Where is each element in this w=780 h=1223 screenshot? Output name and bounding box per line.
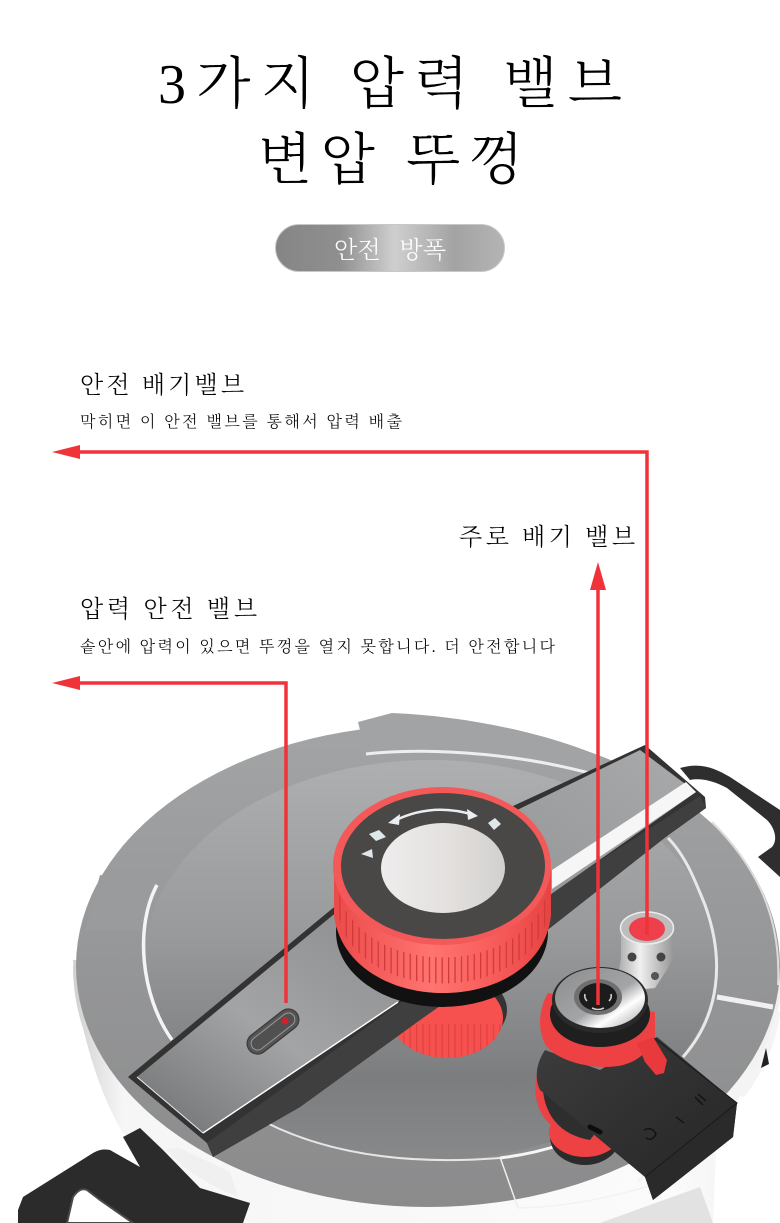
silver valve cap [552,967,648,1033]
red collar [540,993,655,1067]
icon: right handle [680,766,780,877]
lower red dial under the bar [398,994,507,1058]
text block: safety exhaust valve: 막히면 이 안전 밸브를 통해서 압력 배출 [80,412,403,431]
lid bottom lug [500,1157,652,1208]
handle bar [128,745,706,1157]
lid left lug [85,875,157,930]
three-slot vent [574,979,622,1015]
icon: safety exhaust valve part [618,912,674,989]
pressure dial knob [333,787,552,995]
lid right latch [717,997,780,1097]
lid highlights [144,885,172,1040]
black selector tab [537,1037,737,1200]
text block: main exhaust valve: 주로 배기 밸브 [459,524,635,551]
rim silver [73,966,780,1223]
arrow: safety exhaust valve [52,445,647,935]
title: 3가지 압력 밸브 [158,54,622,116]
pot body [73,960,778,1223]
text block: pressure safety valve [80,596,556,656]
badge: safety explosion-proof: 안전 방폭 [334,237,446,264]
icon: left handle [18,1128,250,1223]
icon: dial markers [361,818,501,858]
main exhaust valve with lever [535,967,737,1200]
arrow: pressure safety valve [52,676,286,1003]
text block: safety exhaust valve: 안전 배기밸브 [80,372,244,399]
text block: pressure safety valve: 솥안에 압력이 있으면 뚜껑을 열지 못합니다. 더 안전합니다 [80,637,556,656]
title [158,54,622,192]
lid top lug [358,713,612,776]
tab markings [644,1094,706,1139]
red lever [637,1037,667,1075]
title: 변압 뚜껑 [258,130,523,192]
text block: safety exhaust valve [80,372,403,431]
rim silver edge [712,822,778,985]
arrow: main exhaust valve [590,562,606,1005]
black collar under the knob [336,857,548,1007]
text block: pressure safety valve: 압력 안전 밸브 [80,596,257,623]
valve lower stack [550,1109,620,1165]
lid inner panel [145,760,717,1160]
icon: rotate double arrow [388,809,478,825]
pressure cooker illustration [18,713,780,1223]
icon: pressure indicator window [243,1005,303,1058]
lid outer rim [76,725,780,1207]
badge: safety explosion-proof [276,224,504,272]
wire slot [590,1127,600,1132]
